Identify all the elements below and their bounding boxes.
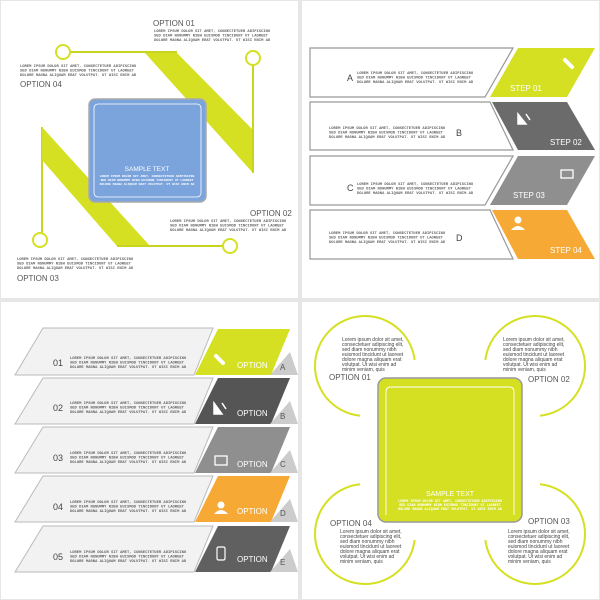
text: option 01: LOREM IPSUM DOLOR SIT AMET, CONSECTETUER ADIPISCING <box>154 30 271 34</box>
panel: bottom-right clover diagram <box>302 302 599 599</box>
text: option 02: OPTION 02 <box>528 375 570 384</box>
text: option 01: consectetuer adipiscing elit, <box>342 342 403 348</box>
text: option 02: minim veniam, quis <box>503 367 546 373</box>
row D: D <box>456 233 463 243</box>
row 01: OPTION <box>237 361 268 370</box>
row 04: OPTION <box>237 507 268 516</box>
text: option 02: volutpat. Ut wisi enim ad <box>503 362 557 368</box>
text: option 04: SED DIAM NONUMMY NIBH EUISMOD TINCIDUNT UT LAOREET <box>20 70 135 74</box>
row 04: LOREM IPSUM DOLOR SIT AMET, CONSECTETUER ADIPISCING <box>70 501 187 505</box>
text: option 02: DOLORE MAGNA ALIQUAM ERAT VOLUTPAT. UT WISI ENIM AD <box>170 229 287 233</box>
row 02: SED DIAM NONUMMY NIBH EUISMOD TINCIDUNT UT LAOREET <box>70 406 185 410</box>
icon: circle nodes <box>33 45 260 253</box>
row A: LOREM IPSUM DOLOR SIT AMET, CONSECTETUER ADIPISCING <box>357 72 474 76</box>
center box: sample text: LOREM IPSUM DOLOR SIT AMET, CONSECTETUER ADIPISCING <box>398 500 502 504</box>
row C <box>310 156 595 205</box>
row 03: C <box>280 460 286 469</box>
text: option 02 <box>503 337 570 384</box>
row D: DOLORE MAGNA ALIQUAM ERAT VOLUTPAT. UT WISI ENIM AD <box>329 241 446 245</box>
row 05: E <box>280 558 285 567</box>
text: option 02: LOREM IPSUM DOLOR SIT AMET, CONSECTETUER ADIPISCING <box>170 220 287 224</box>
text: option 02: sed diam nonummy nibh <box>503 347 558 353</box>
row 05 <box>15 526 298 572</box>
row 04: 04 <box>53 502 63 512</box>
row C: STEP 03 <box>513 191 545 200</box>
text: option 02: consectetuer adipiscing elit, <box>503 342 564 348</box>
center box: sample text <box>378 378 522 522</box>
text: option 04: sed diam nonummy nibh <box>340 539 395 545</box>
text: option 04: dolore magna aliquam erat <box>340 549 400 555</box>
text: option 04: euismod tincidunt ut laoreet <box>340 544 402 550</box>
row 01: SED DIAM NONUMMY NIBH EUISMOD TINCIDUNT UT LAOREET <box>70 362 185 366</box>
text: option 01: OPTION 01 <box>329 373 371 382</box>
row 05: 05 <box>53 552 63 562</box>
text: option 04: minim veniam, quis <box>340 559 383 565</box>
text: option 01: dolore magna aliquam erat <box>342 357 402 363</box>
row A: A <box>347 73 353 83</box>
row 03: SED DIAM NONUMMY NIBH EUISMOD TINCIDUNT UT LAOREET <box>70 456 185 460</box>
text: option 04: OPTION 04 <box>330 519 372 528</box>
text: option 03: SED DIAM NONUMMY NIBH EUISMOD TINCIDUNT UT LAOREET <box>17 262 132 266</box>
row B: DOLORE MAGNA ALIQUAM ERAT VOLUTPAT. UT WISI ENIM AD <box>329 136 446 140</box>
row B: LOREM IPSUM DOLOR SIT AMET, CONSECTETUER ADIPISCING <box>329 127 446 131</box>
text: option 03: consectetuer adipiscing elit, <box>508 534 569 540</box>
text: option 02: Lorem ipsum dolor sit amet, <box>503 337 565 343</box>
text: option 03: sed diam nonummy nibh <box>508 539 563 545</box>
row 04 <box>15 476 298 522</box>
text: option 01: minim veniam, quis <box>342 367 385 373</box>
lower band <box>42 127 223 246</box>
center box: sample text: SAMPLE TEXT <box>426 491 475 498</box>
text: option 02: OPTION 02 <box>250 209 292 218</box>
row C: SED DIAM NONUMMY NIBH EUISMOD TINCIDUNT UT LAOREET <box>357 188 472 192</box>
row 05: SED DIAM NONUMMY NIBH EUISMOD TINCIDUNT UT LAOREET <box>70 556 185 560</box>
row 04: SED DIAM NONUMMY NIBH EUISMOD TINCIDUNT UT LAOREET <box>70 506 185 510</box>
text: option 03: OPTION 03 <box>528 517 570 526</box>
text: option 01: Lorem ipsum dolor sit amet, <box>342 337 404 343</box>
text: option 03: dolore magna aliquam erat <box>508 549 568 555</box>
row 05: OPTION <box>237 555 268 564</box>
row 02: 02 <box>53 403 63 413</box>
row B: STEP 02 <box>550 138 582 147</box>
row B <box>310 102 595 150</box>
text: option 01: sed diam nonummy nibh <box>342 347 397 353</box>
text: option 01 <box>329 337 404 382</box>
row 03: OPTION <box>237 460 268 469</box>
text: option 02: dolore magna aliquam erat <box>503 357 563 363</box>
row A: STEP 01 <box>510 84 542 93</box>
center box: sample text: SAMPLE TEXT <box>125 166 169 173</box>
row 03: LOREM IPSUM DOLOR SIT AMET, CONSECTETUER ADIPISCING <box>70 452 187 456</box>
row 01: 01 <box>53 358 63 368</box>
row 02: LOREM IPSUM DOLOR SIT AMET, CONSECTETUER ADIPISCING <box>70 402 187 406</box>
center box: sample text: DOLORE MAGNA ALIQUAM ERAT VOLUTPAT. UT WISI ENIM AD <box>398 508 502 512</box>
row 05: LOREM IPSUM DOLOR SIT AMET, CONSECTETUER ADIPISCING <box>70 551 187 555</box>
row 02: OPTION <box>237 409 268 418</box>
row D: STEP 04 <box>550 246 582 255</box>
text: option 04: Lorem ipsum dolor sit amet, <box>340 529 402 535</box>
row D: LOREM IPSUM DOLOR SIT AMET, CONSECTETUER ADIPISCING <box>329 232 446 236</box>
row 02: DOLORE MAGNA ALIQUAM ERAT VOLUTPAT. UT WISI ENIM AD <box>70 411 187 415</box>
row 03: 03 <box>53 453 63 463</box>
text: option 02: SED DIAM NONUMMY NIBH EUISMOD TINCIDUNT UT LAOREET <box>170 224 285 228</box>
text: option 04 <box>20 65 137 89</box>
row 05: DOLORE MAGNA ALIQUAM ERAT VOLUTPAT. UT WISI ENIM AD <box>70 560 187 564</box>
panel: bottom-left options list <box>1 302 298 599</box>
text: option 03 <box>508 517 570 565</box>
text: option 03: LOREM IPSUM DOLOR SIT AMET, CONSECTETUER ADIPISCING <box>17 258 134 262</box>
row 04: D <box>280 509 286 518</box>
row 03 <box>15 427 298 473</box>
text: option 01 <box>153 19 271 43</box>
text: option 03: volutpat. Ut wisi enim ad <box>508 554 562 560</box>
center box: sample text: SED DIAM NONUMMY NIBH EUISMOD TINCIDUNT UT LAOREET <box>101 178 194 182</box>
text: option 01: volutpat. Ut wisi enim ad <box>342 362 396 368</box>
panel: top-right steps <box>302 1 599 298</box>
upper band <box>70 52 253 173</box>
text: option 04: consectetuer adipiscing elit, <box>340 534 401 540</box>
text: option 03: DOLORE MAGNA ALIQUAM ERAT VOLUTPAT. UT WISI ENIM AD <box>17 267 134 271</box>
row A <box>310 48 595 97</box>
text: option 02: euismod tincidunt ut laoreet <box>503 352 565 358</box>
text: option 04 <box>330 519 402 565</box>
row A: DOLORE MAGNA ALIQUAM ERAT VOLUTPAT. UT WISI ENIM AD <box>357 81 474 85</box>
text: option 04: volutpat. Ut wisi enim ad <box>340 554 394 560</box>
text: option 01: euismod tincidunt ut laoreet <box>342 352 404 358</box>
center box: sample text: SED DIAM NONUMMY NIBH EUISMOD TINCIDUNT UT LAOREET <box>399 504 501 508</box>
center box: sample text: DOLORE MAGNA ALIQUAM ERAT VOLUTPAT. UT WISI ENIM AD <box>100 182 194 186</box>
center box: sample text <box>89 99 206 202</box>
row B: B <box>456 128 462 138</box>
text: option 02 <box>170 209 292 233</box>
text: option 03: euismod tincidunt ut laoreet <box>508 544 570 550</box>
row C: DOLORE MAGNA ALIQUAM ERAT VOLUTPAT. UT WISI ENIM AD <box>357 192 474 196</box>
row D <box>310 210 595 259</box>
text: option 01: DOLORE MAGNA ALIQUAM ERAT VOLUTPAT. UT WISI ENIM AD <box>154 39 271 43</box>
row C: C <box>347 183 354 193</box>
row 01 <box>15 328 298 375</box>
row A: SED DIAM NONUMMY NIBH EUISMOD TINCIDUNT UT LAOREET <box>357 76 472 80</box>
row C: LOREM IPSUM DOLOR SIT AMET, CONSECTETUER ADIPISCING <box>357 183 474 187</box>
row 04: DOLORE MAGNA ALIQUAM ERAT VOLUTPAT. UT WISI ENIM AD <box>70 510 187 514</box>
text: option 03: Lorem ipsum dolor sit amet, <box>508 529 570 535</box>
panel: top-left option diagram <box>1 1 298 298</box>
center box: sample text: LOREM IPSUM DOLOR SIT AMET, CONSECTETUER ADIPISCING <box>100 174 194 178</box>
text: option 04: DOLORE MAGNA ALIQUAM ERAT VOLUTPAT. UT WISI ENIM AD <box>20 74 137 78</box>
row 01: DOLORE MAGNA ALIQUAM ERAT VOLUTPAT. UT WISI ENIM AD <box>70 366 187 370</box>
text: option 01: OPTION 01 <box>153 19 195 28</box>
text: option 03: minim veniam, quis <box>508 559 551 565</box>
text: option 01: SED DIAM NONUMMY NIBH EUISMOD TINCIDUNT UT LAOREET <box>154 34 269 38</box>
text: option 04: OPTION 04 <box>20 80 62 89</box>
row 03: DOLORE MAGNA ALIQUAM ERAT VOLUTPAT. UT WISI ENIM AD <box>70 461 187 465</box>
text: option 03 <box>17 258 134 283</box>
clover outline <box>315 316 585 584</box>
text: option 03: OPTION 03 <box>17 274 59 283</box>
row 01: A <box>280 363 286 372</box>
row 01: LOREM IPSUM DOLOR SIT AMET, CONSECTETUER ADIPISCING <box>70 357 187 361</box>
row 02: B <box>280 412 285 421</box>
text: option 04: LOREM IPSUM DOLOR SIT AMET, CONSECTETUER ADIPISCING <box>20 65 137 69</box>
row 02 <box>15 378 298 424</box>
row B: SED DIAM NONUMMY NIBH EUISMOD TINCIDUNT UT LAOREET <box>329 132 444 136</box>
row D: SED DIAM NONUMMY NIBH EUISMOD TINCIDUNT UT LAOREET <box>329 236 444 240</box>
